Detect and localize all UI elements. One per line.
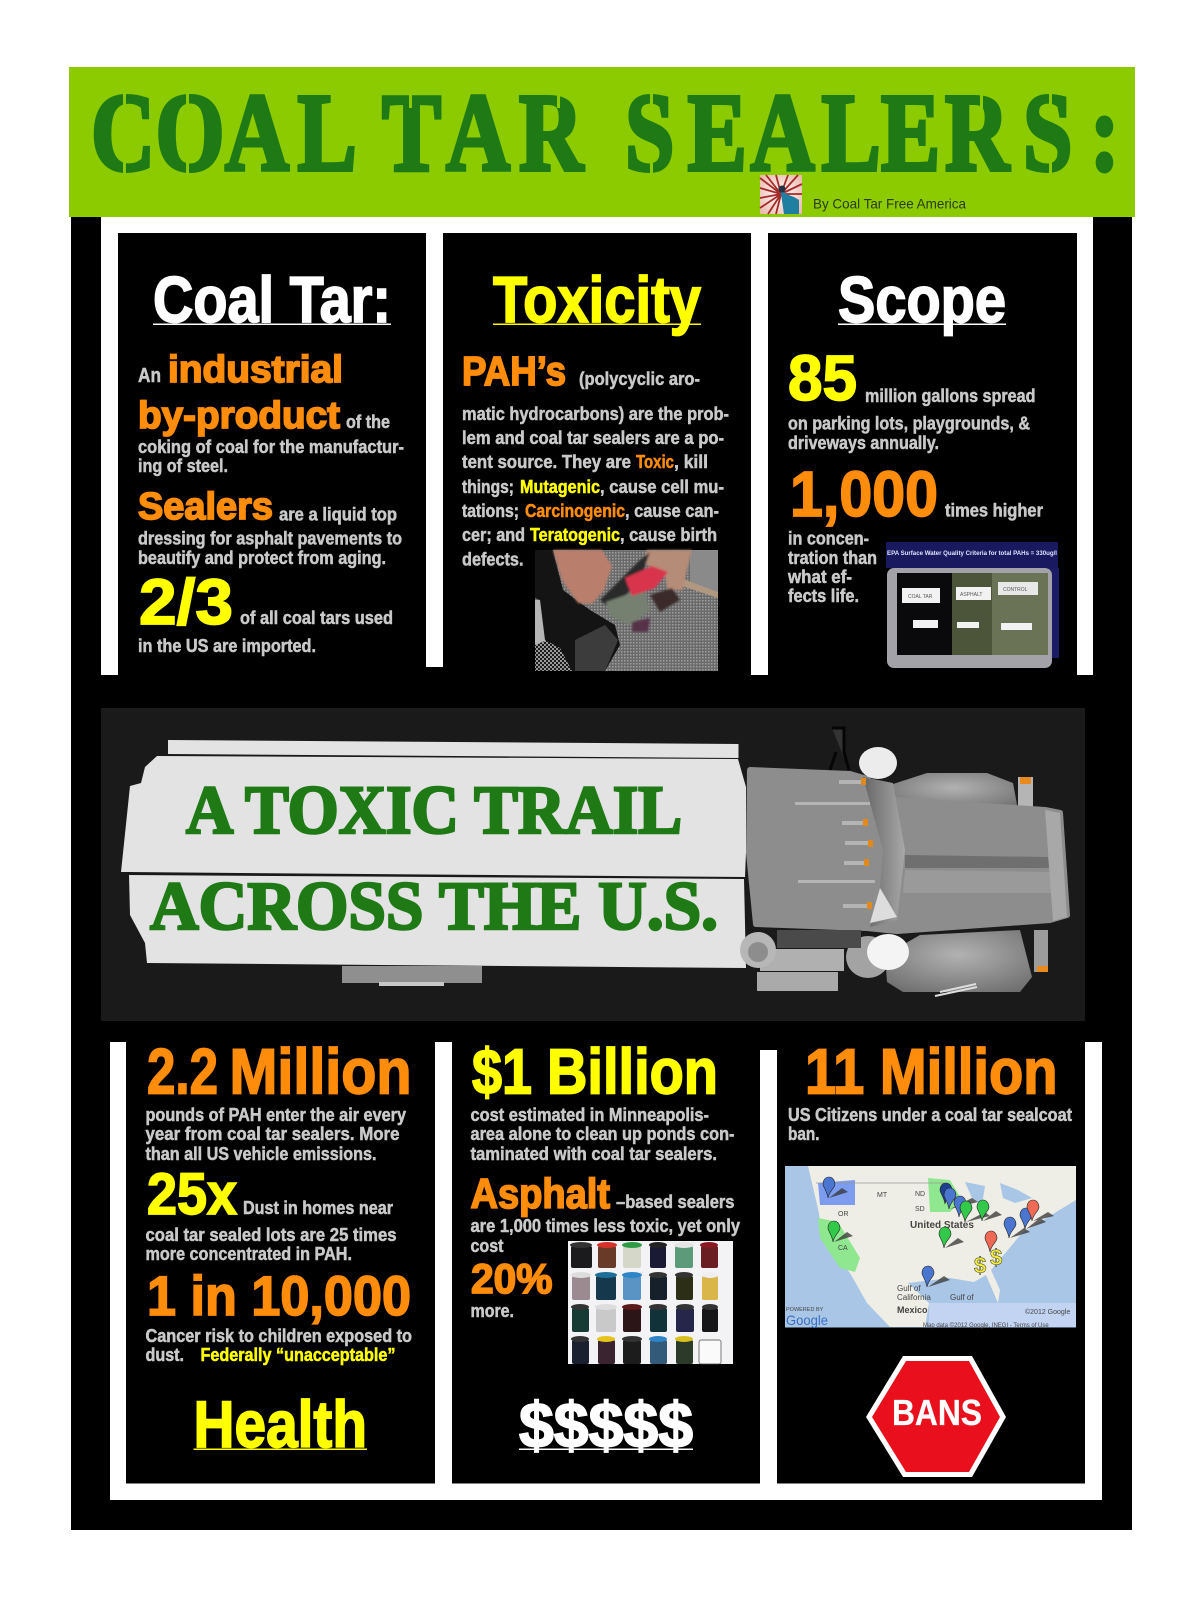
photo: water samples: EPA Surface Water Quality Criteria for total PAHs = 330ug/l [887, 550, 1057, 557]
text: industrial by-product: of the [346, 412, 390, 432]
text: asphalt-based sealers: Asphalt [470, 1170, 610, 1217]
black background panel [71, 216, 1132, 1530]
map labels [786, 1191, 1070, 1329]
map labels: SD [915, 1206, 925, 1213]
panel: scope [768, 233, 1077, 675]
stat: two thirds imported: of all coal tars used [240, 608, 393, 628]
cab [740, 728, 1067, 996]
map labels: POWERED BY [786, 1307, 824, 1313]
map labels: OR [838, 1211, 848, 1218]
stat: 85 million gallons: on parking lots, playgrounds, & [788, 414, 1030, 434]
panel: toxicity [426, 233, 751, 675]
text: PAH explanation [462, 348, 729, 570]
byline: By Coal Tar Free America [813, 196, 966, 212]
stat: 1,000 times higher: fects life. [788, 586, 859, 606]
map labels: Mexico [897, 1305, 928, 1315]
stat: 1,000 times higher: times higher [945, 500, 1043, 520]
stat: 1,000 times higher: 1,000 [790, 458, 938, 530]
text: industrial by-product [138, 349, 404, 476]
hood stripes [903, 810, 1067, 921]
map labels: MT [877, 1192, 888, 1199]
top fender [890, 773, 1018, 810]
text: sealers: beautify and protect from aging. [138, 548, 386, 568]
tanker truck illustration [121, 728, 1067, 996]
text: PAH explanation: , cause cell mu- [600, 477, 724, 497]
wheel tread [935, 984, 977, 996]
stat: two thirds imported: 2/3 [139, 566, 233, 638]
text: PAH explanation: tent source. They are [462, 452, 631, 472]
label: health: Health [194, 1387, 367, 1461]
panel: health [126, 1036, 435, 1484]
photo: water samples: COAL TAR [908, 594, 933, 600]
stat: $1 billion: Billion [547, 1036, 718, 1108]
photo: water samples: CONTROL [1003, 587, 1028, 593]
mirrors [846, 747, 909, 978]
stat: 85 million gallons: 85 [788, 342, 857, 414]
photo: water samples [885, 542, 1059, 670]
map labels: Map data ©2012 Google, INEGI - Terms of Use [923, 1322, 1049, 1329]
bucket lids [570, 1242, 718, 1342]
stat: 11 million [788, 1036, 1072, 1144]
dollar pins: $ [974, 1253, 986, 1278]
map labels: Google [786, 1312, 828, 1328]
map labels: ©2012 Google [1025, 1308, 1070, 1316]
text: PAH explanation: Mutagenic [520, 477, 600, 497]
map labels: United States [910, 1220, 974, 1231]
text: PAH explanation: , cause can- [625, 501, 719, 521]
stat: 25x dust [146, 1162, 396, 1264]
marker lights [795, 778, 875, 909]
map labels: Gulf of [950, 1293, 974, 1302]
stat: $1 billion: $1 [472, 1036, 532, 1108]
text: asphalt-based sealers [470, 1170, 740, 1321]
truck panel [101, 708, 1085, 1021]
text: PAH explanation: Toxic [636, 452, 674, 472]
stat: 2.2 million: Million [230, 1036, 412, 1108]
stat: 25x dust: coal tar sealed lots are 25 times [146, 1225, 396, 1245]
bucket bodies [571, 1246, 721, 1364]
stat: 1,000 times higher: in concen- [788, 528, 869, 548]
stat: 1,000 times higher: tration than [788, 548, 877, 568]
stat: 85 million gallons: million gallons spread [865, 386, 1036, 406]
fuel posts [1018, 777, 1048, 972]
text: asphalt-based sealers: are 1,000 times less toxic, yet only [470, 1216, 740, 1236]
text: PAH explanation: (polycyclic aro- [579, 369, 700, 389]
stat: 25x dust: 25x [147, 1162, 237, 1227]
stat: 2.2 million: year from coal tar sealers. More [146, 1124, 400, 1144]
text: PAH explanation: lem and coal tar sealers are a po- [462, 428, 724, 448]
steps and tank [740, 930, 861, 991]
label: dollar signs: $$$$$ [519, 1389, 693, 1461]
hood [749, 770, 1067, 931]
stat: 1,000 times higher: what ef- [787, 567, 852, 587]
stat: 1 in 10,000: 1 in 10,000 [147, 1264, 411, 1327]
stat: two thirds imported: in the US are imported. [138, 636, 316, 656]
icon: statue of liberty logo [760, 175, 802, 214]
text: sealers: dressing for asphalt pavements to [138, 528, 402, 548]
bottom section white frame [110, 1036, 1102, 1500]
stat: 1 in 10,000: dust. [146, 1345, 184, 1365]
text: across the U.S.: ACROSS THE U.S. [150, 868, 718, 944]
dollar pins [974, 1245, 1002, 1278]
antenna mirror bracket [830, 728, 849, 770]
exhaust stack [863, 777, 905, 927]
text: PAH explanation: , cause birth [620, 525, 717, 545]
heading: coal tar: Coal Tar: [153, 263, 391, 336]
text: industrial by-product: coking of coal for the manufactur- [138, 437, 404, 457]
text: PAH explanation: Carcinogenic [525, 501, 625, 521]
stat: two thirds imported [138, 566, 393, 656]
stat: 11 million: 11 Million [805, 1036, 1058, 1108]
text: PAH explanation: Teratogenic [530, 525, 620, 545]
stat: 85 million gallons: driveways annually. [788, 433, 939, 453]
top section white frame [101, 217, 1093, 675]
stat: 1 in 10,000 [146, 1264, 412, 1365]
photo: oiled animal in hands [535, 550, 718, 671]
stat: $1 billion: area alone to clean up ponds con- [470, 1124, 734, 1144]
stat: $1 billion: cost estimated in Minneapolis- [470, 1105, 709, 1125]
map pin shadows [829, 1188, 1054, 1287]
text: asphalt-based sealers: cost [470, 1236, 504, 1256]
stat: $1 billion [470, 1036, 734, 1164]
text: sealers [138, 486, 402, 568]
stat: 2.2 million [146, 1036, 412, 1164]
text: a toxic trail: A TOXIC TRAIL [186, 772, 682, 848]
map labels: CA [838, 1245, 848, 1252]
stat: 2.2 million: than all US vehicle emissions. [146, 1144, 376, 1164]
text: PAH explanation: PAH’s [462, 348, 566, 394]
map pins [823, 1177, 1039, 1287]
stat: 1,000 times higher [787, 458, 1043, 606]
text: PAH explanation: things; [462, 477, 514, 497]
stat: 25x dust: more concentrated in PAH. [146, 1244, 352, 1264]
text: asphalt-based sealers: –based sealers [616, 1192, 734, 1212]
text: PAH explanation: tations; [462, 501, 519, 521]
stat: 1 in 10,000: Federally “unacceptable” [200, 1345, 396, 1365]
tank [121, 740, 746, 986]
text: asphalt-based sealers: more. [470, 1301, 514, 1321]
text: sealers: are a liquid top [279, 504, 397, 524]
panel: costs [452, 1036, 760, 1484]
stat: 25x dust: Dust in homes near [243, 1198, 393, 1218]
photo: sealer buckets [568, 1241, 733, 1364]
stat: 2.2 million: pounds of PAH enter the air every [146, 1105, 406, 1125]
map: US coal tar bans [785, 1166, 1076, 1329]
bottom fender [885, 930, 1032, 992]
stat: 85 million gallons [788, 342, 1036, 453]
panel: coal tar [118, 233, 426, 675]
text: industrial by-product: industrial [168, 349, 343, 391]
stat: 2.2 million: 2.2 [147, 1036, 218, 1108]
text: industrial by-product: ing of steel. [138, 456, 228, 476]
header banner [69, 67, 1135, 217]
stat: 1 in 10,000: Cancer risk to children exposed to [146, 1326, 412, 1346]
map labels: California [897, 1293, 931, 1302]
stat: $1 billion: taminated with coal tar sealers. [470, 1144, 717, 1164]
text: industrial by-product: An [138, 365, 161, 387]
text: PAH explanation: defects. [462, 550, 524, 570]
panel: bans [777, 1036, 1085, 1484]
photo: water samples: ASPHALT [960, 592, 982, 598]
map labels: Gulf of [897, 1284, 921, 1293]
heading: scope: Scope [838, 263, 1006, 336]
text: PAH explanation: , kill [674, 452, 708, 472]
title: COAL TAR SEALERS: [91, 71, 1120, 194]
icon: stop sign bans: BANS [892, 1392, 982, 1433]
stat: 11 million: ban. [788, 1124, 820, 1144]
text: PAH explanation: matic hydrocarbons) are the prob- [462, 404, 729, 424]
text: asphalt-based sealers: 20% [471, 1255, 552, 1302]
text: PAH explanation: cer; and [462, 525, 525, 545]
stat: 11 million: US Citizens under a coal tar sealcoat [788, 1105, 1072, 1125]
map labels: ND [915, 1191, 925, 1198]
heading: toxicity: Toxicity [493, 263, 701, 336]
text: industrial by-product: by-product [138, 395, 340, 437]
dollar pins: $ [990, 1245, 1002, 1270]
text: sealers: Sealers [138, 486, 273, 528]
icon: stop sign bans [866, 1356, 1006, 1477]
